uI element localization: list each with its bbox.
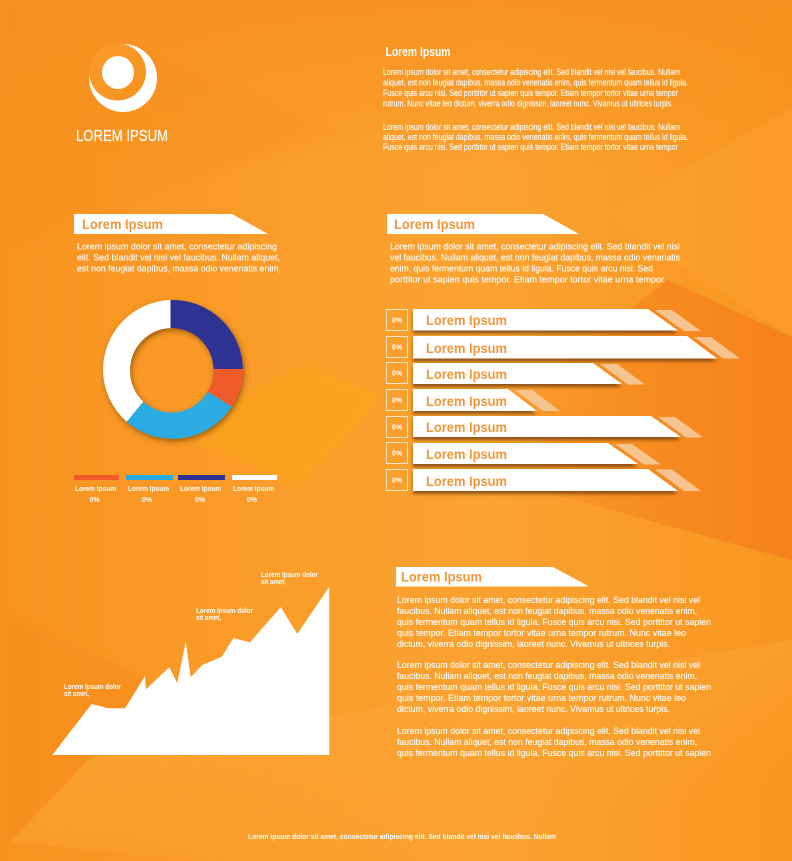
- top text block: Lorem Ipsum: [386, 45, 450, 59]
- right intro text: Lorem ipsum dolor sit amet, consectetur adipiscing elit. Sed blandit vel nisi: [390, 242, 680, 252]
- area chart: [52, 572, 329, 755]
- bar row 4: Lorem Ipsum: [426, 394, 507, 409]
- paragraph 3: faucibus. Nullam aliquet, est non feugiat dapibus, massa odio venenatis enim,: [397, 737, 697, 748]
- bar row 1: [386, 309, 701, 331]
- paragraph 1: quis tempor. Etiam tempor tortor vitae urna tempor rutrum. Nunc vitae leo: [397, 628, 686, 639]
- bar row 2: 0%: [392, 344, 403, 352]
- paragraph 3: Lorem ipsum dolor sit amet, consectetur adipiscing elit. Sed blandit vel nisi vel: [397, 726, 700, 737]
- bar row 6: [386, 442, 661, 464]
- donut chart: [103, 300, 243, 439]
- heading ribbon: lower: [396, 567, 589, 586]
- top text block: [383, 45, 688, 153]
- bar row 7: Lorem Ipsum: [426, 474, 507, 489]
- right intro text: vel faucibus. Nullam aliquet, est non feugiat dapibus, massa odio venenatis: [390, 252, 680, 264]
- paragraph 1: faucibus. Nullam aliquet, est non feugiat dapibus, massa odio venenatis enim,: [397, 606, 697, 617]
- right intro text: porttitor ut sapien quis tempor. Etiam tempor tortor vitae urna tempor: [390, 274, 665, 286]
- right intro text: [390, 242, 680, 286]
- top text block: rutrum. Nunc vitae leo dictum, viverra odio dignissim, laoreet nunc. Vivamus ut ultrices turpis.: [383, 98, 673, 110]
- bar row 2: [386, 336, 740, 358]
- paragraph 3: quis fermentum quam tellus id ligula. Fusce quis arcu nisi. Sed porttitor ut sapien: [397, 748, 711, 759]
- panel: lower text section: [396, 567, 711, 759]
- paragraph 2: quis tempor. Etiam tempor tortor vitae urna tempor rutrum. Nunc vitae leo: [397, 693, 686, 704]
- paragraph 1: [397, 595, 711, 650]
- left intro text: elit. Sed blandit vel nisi vel faucibus. Nullam aliquet,: [77, 252, 280, 264]
- top text block: Lorem ipsum dolor sit amet, consectetur adipiscing elit. Sed blandit vel nisi vel faucibus. Nullam: [383, 67, 680, 78]
- paragraph 2: [397, 660, 711, 715]
- top text block: Fusce quis arcu nisi. Sed porttitor ut sapien quis tempor. Etiam tempor tortor vitae urna tempor: [383, 88, 679, 99]
- logo: [89, 44, 157, 112]
- bar row 1: 0%: [392, 318, 403, 324]
- heading ribbon: left: [74, 214, 268, 234]
- chart label 2: sit amet,: [196, 615, 221, 622]
- top text block: Fusce quis arcu nisi. Sed porttitor ut sapien quis tempor. Etiam tempor tortor vitae urna tempor: [383, 142, 679, 153]
- bar row 6: Lorem Ipsum: [426, 447, 507, 462]
- legend: 0%: [247, 497, 258, 504]
- footer text: Lorem ipsum dolor sit amet, consectetur adipiscing elit. Sed blandit vel nisi vel faucibus. Nullam: [248, 832, 556, 841]
- legend: Lorem Ipsum: [128, 486, 169, 493]
- paragraph 1: Lorem ipsum dolor sit amet, consectetur adipiscing elit. Sed blandit vel nisi vel: [397, 595, 700, 606]
- legend: Lorem Ipsum: [233, 486, 274, 493]
- bar row 3: Lorem Ipsum: [426, 367, 507, 382]
- bar row 3: 0%: [392, 370, 403, 378]
- panel: ranked bars section: [386, 214, 740, 491]
- chart label 3: [261, 572, 318, 586]
- bar row 4: 0%: [392, 398, 403, 404]
- paragraph 2: faucibus. Nullam aliquet, est non feugiat dapibus, massa odio venenatis enim,: [397, 671, 697, 682]
- bar row 7: [386, 469, 701, 491]
- bar row 4: [386, 389, 560, 411]
- legend: 0%: [89, 497, 100, 504]
- top text block: Lorem ipsum dolor sit amet, consectetur adipiscing elit. Sed blandit vel nisi vel faucibus. Nullam: [383, 122, 680, 133]
- chart label 2: Lorem Ipsum dolor: [196, 608, 253, 615]
- left intro text: Lorem ipsum dolor sit amet, consectetur adipiscing: [77, 242, 277, 252]
- chart label 1: sit amet,: [64, 691, 89, 698]
- paragraph 2: quis fermentum quam tellus id ligula. Fusce quis arcu nisi. Sed porttitor ut sapien: [397, 682, 711, 693]
- bar row 5: [386, 416, 703, 438]
- bar row 7: 0%: [392, 478, 403, 484]
- chart label 1: [64, 684, 121, 698]
- chart label 2: [196, 608, 253, 622]
- heading ribbon: right: Lorem Ipsum: [394, 217, 475, 232]
- panel: donut chart section: [74, 214, 281, 504]
- chart label 3: sit amet,: [261, 579, 286, 586]
- paragraph 3: [397, 726, 711, 759]
- legend: [74, 475, 277, 504]
- paragraph 2: dictum, viverra odio dignissim, laoreet nunc. Vivamus ut ultrices turpis.: [397, 704, 670, 715]
- bar row 5: Lorem Ipsum: [426, 420, 507, 435]
- bar row 5: 0%: [392, 424, 403, 432]
- chart label 1: Lorem Ipsum dolor: [64, 684, 121, 691]
- paragraph 1: quis fermentum quam tellus id ligula. Fusce quis arcu nisi. Sed porttitor ut sapien: [397, 617, 711, 628]
- legend: 0%: [142, 497, 153, 504]
- legend: 0%: [195, 497, 206, 504]
- bar row 6: 0%: [392, 450, 403, 458]
- heading ribbon: left: Lorem Ipsum: [82, 217, 163, 232]
- bar row 2: Lorem Ipsum: [426, 341, 507, 356]
- right intro text: enim, quis fermentum quam tellus id ligula. Fusce quis arcu nisi. Sed: [390, 264, 653, 274]
- paragraph 1: dictum, viverra odio dignissim, laoreet nunc. Vivamus ut ultrices turpis.: [397, 639, 670, 650]
- bar row 1: Lorem Ipsum: [426, 313, 507, 328]
- paragraph 2: Lorem ipsum dolor sit amet, consectetur adipiscing elit. Sed blandit vel nisi vel: [397, 660, 700, 671]
- logo wordmark: LOREM IPSUM: [76, 128, 168, 145]
- heading ribbon: right: [387, 214, 579, 234]
- legend: Lorem Ipsum: [75, 486, 116, 493]
- bar row 3: [386, 362, 645, 384]
- legend: Lorem Ipsum: [180, 486, 221, 493]
- top text block: aliquet, est non feugiat dapibus, massa odio venenatis enim, quis fermentum quam tellus id ligula.: [383, 132, 688, 143]
- left intro text: [77, 242, 281, 274]
- top text block: aliquet, est non feugiat dapibus, massa odio venenatis enim, quis fermentum quam tellus id ligula.: [383, 78, 688, 88]
- chart label 3: Lorem Ipsum dolor: [261, 572, 318, 579]
- heading ribbon: lower: Lorem Ipsum: [401, 570, 482, 584]
- left intro text: est non feugiat dapibus, massa odio venenatis enim,: [77, 264, 281, 274]
